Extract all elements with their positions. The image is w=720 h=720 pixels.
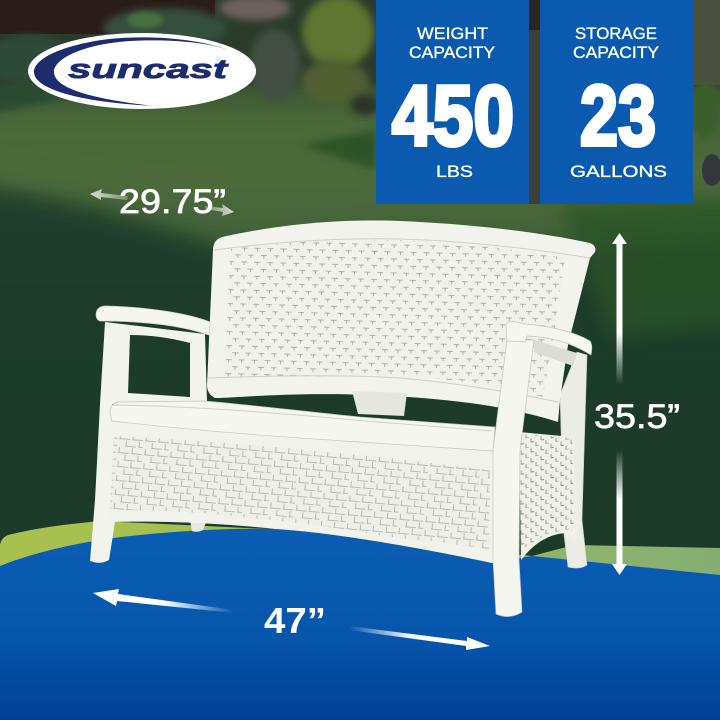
unit: lbs: LBS [436,162,473,181]
bench back wicker [225,240,565,397]
bench front wicker [110,436,490,550]
bench middle foot [190,520,207,532]
bench centre support [352,391,407,416]
width arrow left [93,589,234,613]
bench front left leg [90,404,115,563]
unit: gallons: GALLONS [570,162,667,181]
value: 23: 23 [580,69,656,164]
bench front panel frame [108,421,493,563]
bench [90,220,595,617]
logo swoosh [34,37,229,106]
width label: 47” [264,600,326,641]
bench side panel [519,432,578,560]
bench back frame [207,220,595,422]
label: storage capacity: STORAGE [575,25,657,43]
bench front right post [493,340,534,617]
width arrow right [349,626,490,650]
green ground band [0,521,720,580]
panel: weight capacity: CAPACITY [409,44,495,62]
bench top rail shading [214,239,590,258]
height label: 35.5” [594,398,680,436]
label: weight capacity: WEIGHT [417,25,488,43]
logo: suncast [28,33,256,109]
panel: storage capacity: CAPACITY [573,44,659,62]
depth label: 29.75” [119,183,226,221]
height arrow bottom [612,450,627,575]
bench seat [110,401,495,451]
bench rear right post [560,352,587,568]
blue ground panel [0,529,720,720]
bench left arm [100,322,207,404]
value: 450: 450 [392,69,514,164]
depth arrows [90,189,234,216]
logo wordmark: suncast [68,54,229,84]
panel: storage capacity [540,0,693,204]
panel: weight capacity [376,0,529,204]
height arrow top [612,233,627,385]
bench right arm [534,340,577,366]
bench lower back rail shading [208,376,558,402]
